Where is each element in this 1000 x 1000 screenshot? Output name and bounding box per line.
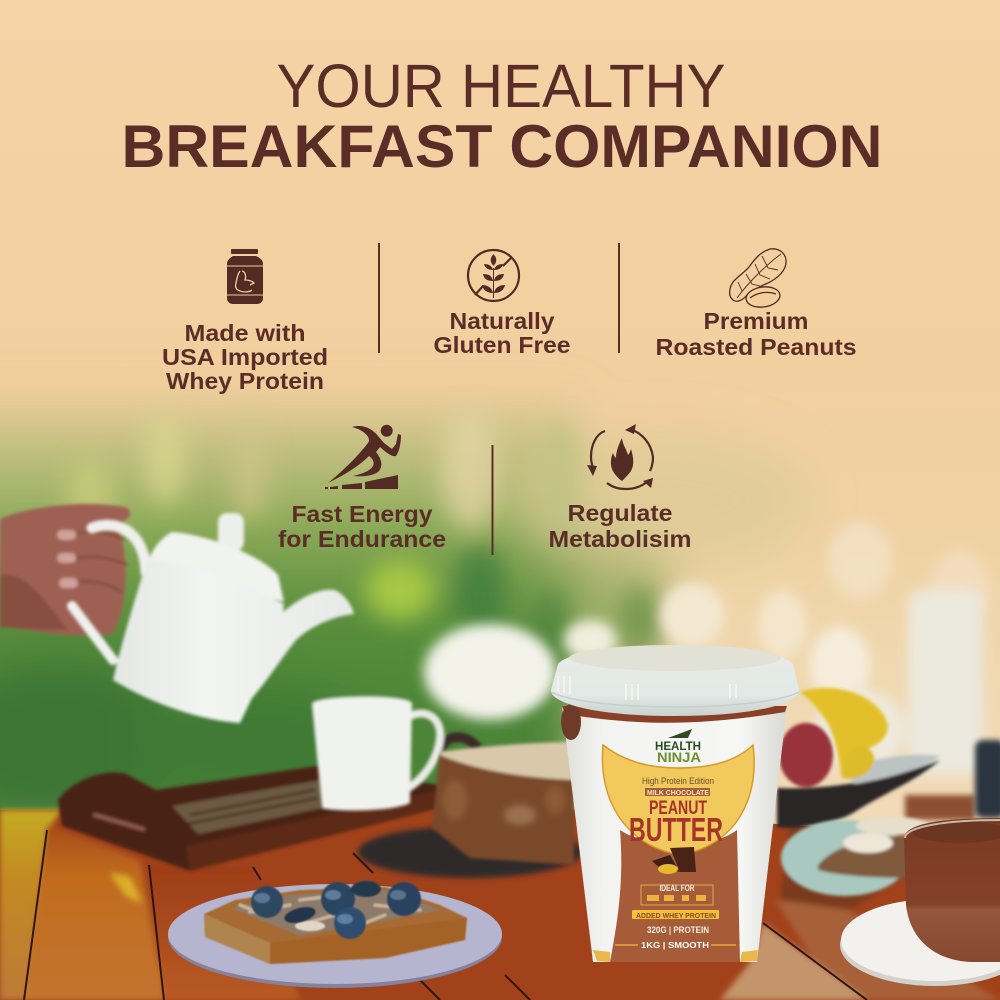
label: for Endurance xyxy=(278,526,446,552)
feature: gluten free xyxy=(434,250,570,358)
label xyxy=(278,501,446,552)
yellow label xyxy=(602,745,754,855)
label: Metabolisim xyxy=(548,526,692,552)
label xyxy=(162,320,328,394)
whey badge: 1KG | SMOOTH xyxy=(641,940,709,950)
brown lower label xyxy=(610,830,740,962)
brand logo xyxy=(655,729,701,765)
icon: flame with cycle arrows xyxy=(587,424,653,489)
label xyxy=(434,308,570,358)
hand holding teapot xyxy=(0,504,130,636)
mug xyxy=(312,696,478,811)
coffee cup and saucer xyxy=(840,818,1000,986)
label: Roasted Peanuts xyxy=(656,334,856,360)
label: Fast Energy xyxy=(292,501,432,527)
whey badge xyxy=(615,910,736,950)
label: Gluten Free xyxy=(434,332,570,358)
brand logo: HEALTH xyxy=(655,739,701,753)
icon: runner on steps xyxy=(325,425,401,489)
tray xyxy=(58,766,440,871)
small side plate with toast xyxy=(781,817,928,896)
plate with toast and blueberries xyxy=(168,881,502,988)
label text xyxy=(629,776,723,848)
label: Regulate xyxy=(568,500,672,526)
label text: BUTTER xyxy=(629,811,723,848)
label xyxy=(548,500,692,552)
blueberries xyxy=(251,881,421,939)
icon: protein jar xyxy=(227,249,263,304)
teapot xyxy=(72,513,354,723)
feature: metabolism xyxy=(548,424,692,552)
title: YOUR HEALTHY xyxy=(276,52,726,121)
brand logo: NINJA xyxy=(657,749,701,765)
icon: crossed wheat xyxy=(468,250,519,301)
fruit bowl xyxy=(777,688,940,828)
whey badge: 320G | PROTEIN xyxy=(647,925,709,935)
jar body xyxy=(562,706,787,962)
toast xyxy=(204,887,467,964)
label: Made with xyxy=(184,320,306,346)
label: USA Imported xyxy=(162,344,328,370)
icon: peanut xyxy=(730,249,786,309)
label: Premium xyxy=(704,308,808,334)
label: Naturally xyxy=(450,308,554,334)
ideal-for box: IDEAL FOR xyxy=(660,883,695,893)
whey badge: ADDED WHEY PROTEIN xyxy=(636,913,716,920)
label xyxy=(656,308,856,360)
blueberry bowl xyxy=(975,740,1000,818)
feature: whey protein xyxy=(162,249,328,394)
title xyxy=(122,52,883,180)
background: table xyxy=(0,795,1000,1000)
ideal-for box xyxy=(641,883,713,905)
feature: roasted peanuts xyxy=(656,249,856,360)
peanut butter jar xyxy=(551,645,799,962)
label text: PEANUT xyxy=(649,798,707,819)
title: BREAKFAST COMPANION xyxy=(122,113,883,180)
label: Whey Protein xyxy=(166,368,324,394)
label text: MILK CHOCOLATE xyxy=(647,790,709,797)
jar lid xyxy=(551,645,799,716)
chocolate and peanuts xyxy=(652,847,696,874)
label text: High Protein Edition xyxy=(642,776,714,786)
bread loaf on slate xyxy=(358,742,582,878)
feature: fast energy xyxy=(278,425,446,552)
